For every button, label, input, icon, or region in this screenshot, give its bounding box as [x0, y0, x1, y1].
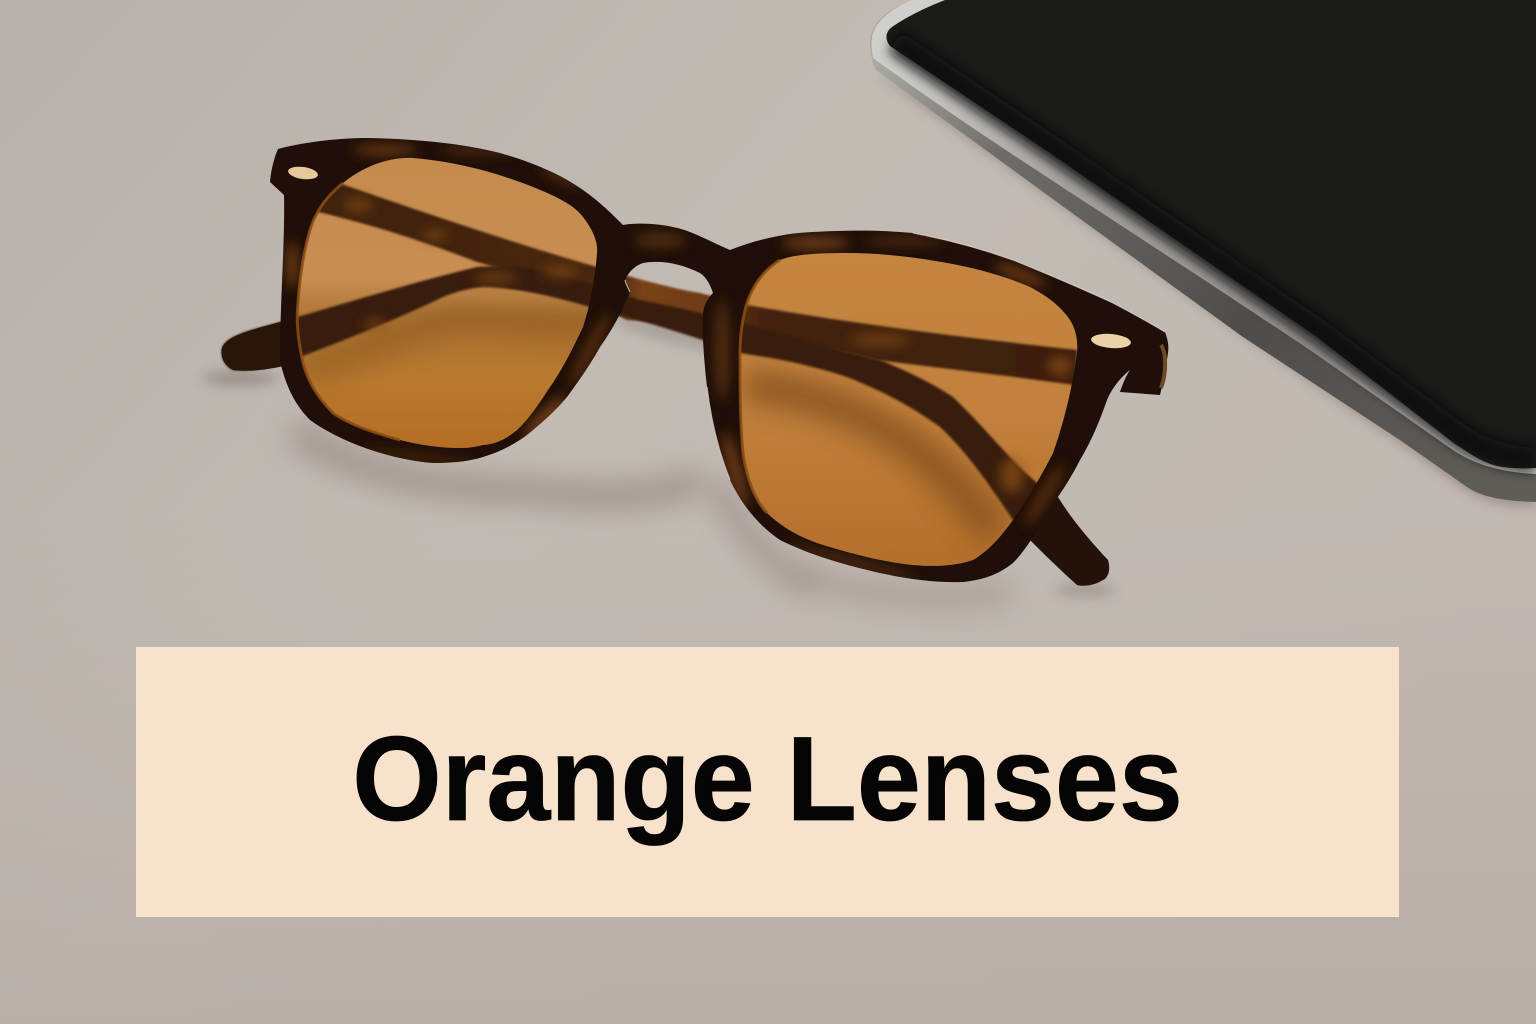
hinge bronze detail: [1161, 345, 1165, 388]
tablet screen dark edge: [895, 42, 1536, 460]
lens inner amber rims: [297, 183, 780, 513]
title: Orange Lenses: Orange Lenses: [352, 712, 1183, 846]
tablet screen: [886, 0, 1536, 468]
temple tail tip, left: [222, 321, 284, 371]
sunglasses: [222, 130, 1175, 590]
title banner: [136, 647, 1399, 917]
tortoiseshell spots on temple arms: [344, 199, 1072, 493]
right orange lens: [735, 250, 1080, 570]
glossy edge highlights: [625, 233, 1165, 480]
soft shadows under glasses: [202, 308, 1115, 597]
hinge rivet right: [1090, 332, 1132, 350]
tortoiseshell frame front: [260, 130, 1175, 590]
tablet device: [870, 0, 1536, 505]
tablet silver rim: [872, 0, 1536, 474]
temple arm, folded: [222, 266, 1055, 537]
left orange lens: [290, 150, 605, 455]
hinge rivet left: [287, 165, 319, 181]
temple arm, long: [310, 180, 1077, 385]
temple tail tip, right: [1027, 497, 1109, 586]
